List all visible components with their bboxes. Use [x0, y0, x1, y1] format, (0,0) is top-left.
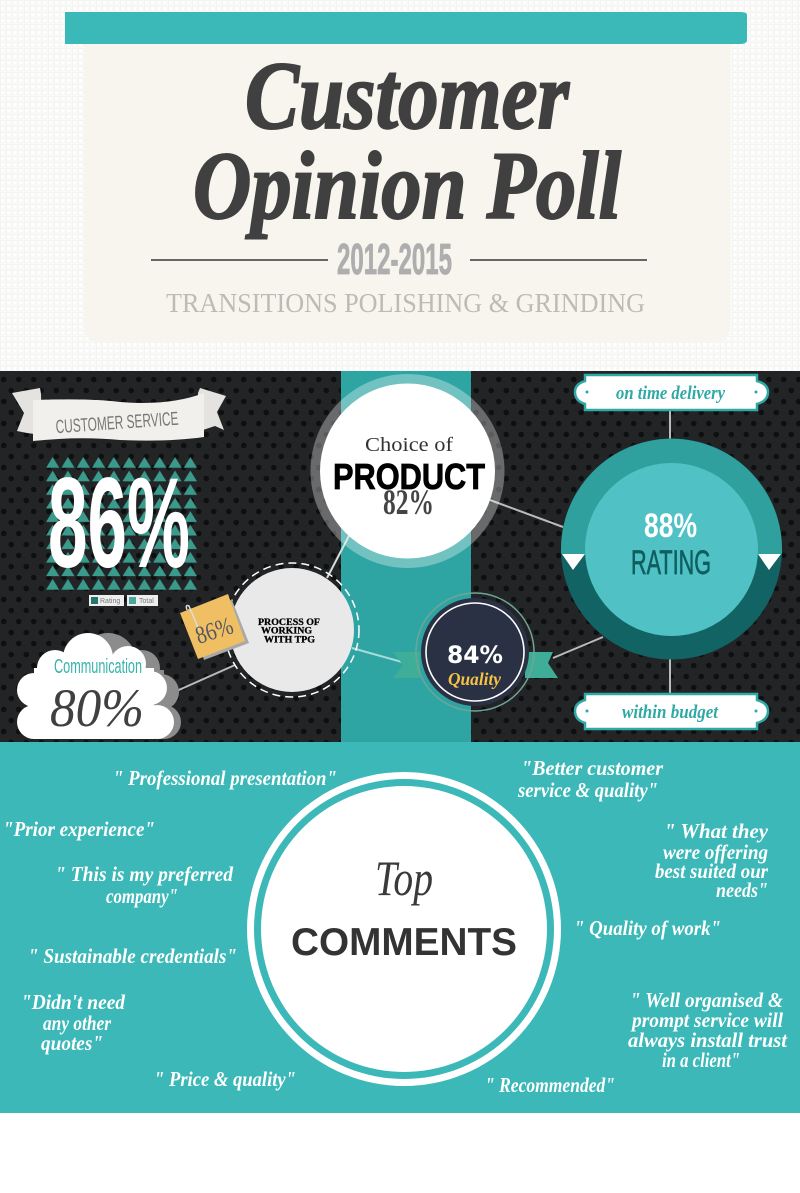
quality badge [393, 593, 558, 711]
panel: title card [65, 12, 747, 343]
connector lines [172, 410, 670, 694]
label: within budget: within budget [622, 702, 719, 723]
chart: triangle pictogram 86%: 86% [48, 452, 190, 595]
rating circle: RATING [631, 544, 711, 582]
comment: well organised: prompt service will [630, 1008, 783, 1032]
quality badge: 84% [447, 641, 503, 669]
comment: well organised: " Well organised & [630, 988, 784, 1012]
header bar [65, 12, 747, 44]
comment: no other quotes: "Didn't need [21, 990, 125, 1014]
sticky note 86% [180, 594, 249, 660]
comment: no other quotes: any other [43, 1011, 112, 1035]
comment: what they were offering: were offering [663, 840, 768, 864]
cloud: communication 80%: Communication [54, 656, 142, 678]
label: on time delivery: on time delivery [616, 383, 725, 404]
customer comments [3, 756, 788, 1097]
comment: sustainable credentials: " Sustainable credentials" [28, 944, 237, 968]
product circle: 82% [383, 482, 434, 522]
top comments circle: COMMENTS [291, 921, 517, 964]
comment: what they were offering: needs" [716, 878, 768, 902]
product circle: PRODUCT [333, 456, 485, 497]
comment: no other quotes [21, 990, 125, 1055]
legend [89, 595, 158, 606]
comment: well organised: in a client" [662, 1048, 740, 1072]
product circle [310, 374, 504, 568]
process circle: WITH TPG [264, 636, 316, 646]
quality badge: Quality [448, 669, 502, 689]
comment: preferred company: " This is my preferred [55, 862, 233, 886]
comment: quality of work: " Quality of work" [574, 916, 721, 940]
comment: what they were offering [655, 819, 769, 902]
comment: better customer service: service & quality" [517, 778, 658, 802]
rating circle: 88% [644, 507, 697, 545]
product circle: Choice of [365, 434, 453, 456]
process circle [225, 563, 359, 697]
legend: Rating [100, 598, 120, 605]
title: Opinion Poll [193, 132, 621, 239]
banner: customer service [12, 388, 226, 441]
comment: prior experience: "Prior experience" [3, 817, 155, 841]
chart: triangle pictogram 86% [45, 452, 198, 595]
label: on time delivery [575, 375, 768, 410]
process circle: WORKING [261, 626, 313, 636]
comment: price and quality: " Price & quality" [154, 1067, 296, 1091]
title [193, 42, 621, 239]
cloud: communication 80% [17, 633, 181, 739]
comment: better customer service [517, 756, 664, 802]
comment: preferred company [55, 862, 233, 908]
comment: professional presentation: " Professional presentation" [113, 766, 337, 790]
label: within budget [575, 694, 768, 729]
panel: top comments background [0, 742, 800, 1113]
top comments circle: Top [375, 850, 433, 906]
date range with rules: 2012-2015 [337, 235, 452, 284]
process circle: PROCESS OF [258, 618, 320, 628]
sticky note 86%: 86% [192, 612, 237, 650]
panel: ratings background [0, 371, 800, 742]
comment: better customer service: "Better customer [521, 756, 664, 780]
rating circle [561, 438, 782, 660]
comment: well organised: always install trust [628, 1028, 788, 1052]
comment: preferred company: company" [106, 884, 178, 908]
comment: no other quotes: quotes" [41, 1031, 103, 1055]
subtitle: TRANSITIONS POLISHING & GRINDING [166, 288, 645, 318]
legend: Total [139, 598, 154, 605]
top comments circle [247, 772, 561, 1086]
comment: what they were offering: best suited our [655, 859, 769, 883]
comment: well organised [628, 988, 788, 1072]
comment: what they were offering: " What they [664, 819, 769, 843]
title: Customer [245, 42, 570, 149]
banner: customer service: CUSTOMER SERVICE [55, 409, 179, 438]
cloud: communication 80%: 80% [50, 678, 144, 738]
comment: recommended: " Recommended" [485, 1073, 615, 1097]
